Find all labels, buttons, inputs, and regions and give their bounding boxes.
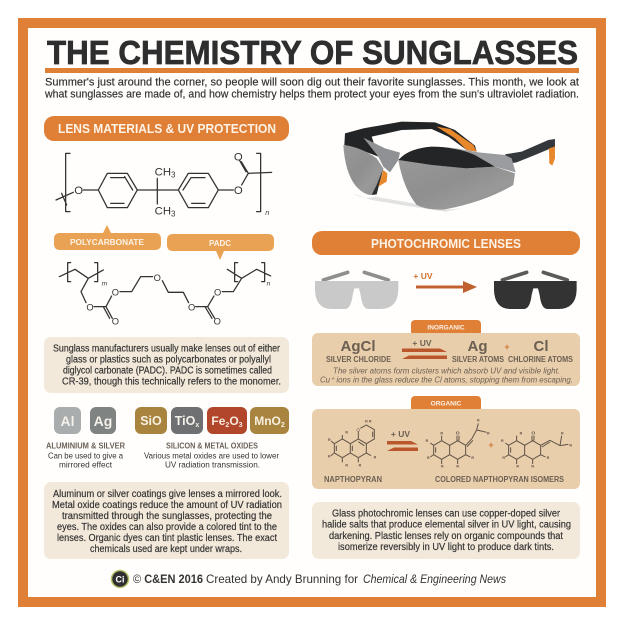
tile: Al [54, 407, 81, 434]
structure: napthopyran isomer two: R [531, 465, 534, 469]
text panel: photochromic: darkening. Plastic lenses rely on organic compounds that [329, 531, 563, 542]
chemical structure: polycarbonate: n [265, 208, 269, 217]
arrow: plus UV [413, 271, 477, 293]
tile: MnO2 [250, 407, 289, 434]
text panel: lens materials: diglycol carbonate (PADC). PADC is sometimes called [63, 366, 272, 376]
structure: napthopyran isomer two: R [501, 439, 504, 443]
icon: dark glasses [494, 272, 577, 309]
caption: silicon and metal oxides: SILICON & METAL OXIDES [166, 442, 259, 450]
caption: silicon and metal oxides [144, 442, 279, 470]
chemical structure: polycarbonate: 3 [171, 210, 176, 219]
chemical structure: PADC: O [188, 302, 195, 312]
tile: SiO [135, 407, 167, 434]
footer credit: © C&EN 2016 [133, 572, 203, 586]
structure: napthopyran: R R [365, 420, 372, 424]
caption: silicon and metal oxides: UV radiation transmission. [165, 460, 260, 470]
chemical structure: PADC: m [102, 281, 108, 288]
text panel: coatings: lenses. Organic dyes can tint plastic lenses. The exact [57, 533, 277, 544]
tile: MnO2: 2 [281, 422, 285, 429]
tile: TiOx: x [195, 422, 199, 429]
text panel: coatings: transmitted through the sunglasses, protecting the [62, 511, 272, 522]
tile: MnO2: MnO [254, 414, 281, 428]
text panel: coatings: Metal oxide coatings reduce the amount of UV radiation [52, 500, 282, 511]
tag: PADC: PADC [209, 239, 231, 248]
chemical structure: PADC: O [112, 317, 119, 327]
text panel: coatings: Aluminum or silver coatings give lenses a mirrored look. [53, 489, 282, 500]
reaction: silver chloride: SILVER CHLORIDE [326, 355, 392, 364]
chemical structure: PADC: n [267, 281, 271, 288]
panel: organic: ORGANIC [431, 400, 462, 408]
title: THE CHEMISTRY OF SUNGLASSES [47, 34, 578, 71]
chemical structure: PADC [59, 263, 271, 327]
reaction: silver chloride: SILVER ATOMS [452, 355, 505, 364]
photo: sunglasses [343, 122, 555, 212]
structure: napthopyran isomer one: R [487, 431, 490, 435]
caption: aluminium and silver: ALUMINIUM & SILVER [46, 442, 125, 450]
tile: Fe2O3: 3 [239, 422, 243, 429]
tile: Ag [90, 407, 116, 434]
tile: Fe2O3: 2 [225, 422, 229, 429]
caption: aluminium and silver: Can be used to give a [48, 452, 124, 460]
chemical structure: polycarbonate: O [74, 185, 83, 197]
structure: napthopyran isomer one: R [440, 431, 443, 435]
chemical structure: polycarbonate: CH [155, 206, 171, 218]
reaction: silver chloride: Cl [534, 338, 548, 355]
label: napthopyran: NAPTHOPYRAN [324, 475, 382, 484]
text panel: coatings [44, 482, 289, 559]
text panel: photochromic: halide salts that produce elemental silver in UV light, causing [322, 520, 571, 530]
structure: napthopyran isomer one: O [456, 430, 460, 436]
structure: napthopyran isomer one: R [427, 456, 430, 460]
tile: Al: Al [60, 413, 74, 429]
tile: SiO: SiO [140, 414, 162, 428]
structure: napthopyran isomer two: R [520, 431, 523, 435]
structure: napthopyran isomer two: R [502, 456, 505, 460]
tile: TiOx [171, 407, 203, 434]
arrow: plus UV: + UV [413, 271, 433, 281]
chemical structure: PADC: O [214, 287, 221, 297]
chemical structure: polycarbonate [56, 152, 272, 219]
text panel: photochromic: Glass photochromic lenses can use copper-doped silver [332, 508, 561, 520]
text panel: lens materials [44, 337, 289, 393]
footer credit: Created by Andy Brunning for [206, 572, 358, 586]
heading: photochromic lenses [312, 231, 580, 255]
structure: napthopyran [328, 420, 377, 468]
tag: polycarbonate [54, 225, 161, 250]
caption: silicon and metal oxides: Various metal oxides are used to lower [144, 452, 279, 460]
structure: napthopyran isomer one: R [456, 465, 459, 469]
explanation: silver atoms: The silver atoms form clusters which absorb UV and visible light. [333, 366, 560, 376]
chemical structure: polycarbonate: CH [155, 166, 171, 178]
tile: Ag: Ag [94, 413, 112, 429]
icon: Ci logo: Ci [116, 574, 124, 584]
tile: TiOx: TiO [175, 414, 195, 428]
structure: napthopyran: R [328, 455, 331, 459]
plus sign: + [488, 440, 494, 450]
structure: napthopyran: R [345, 464, 348, 468]
structure: napthopyran isomer one: R [471, 456, 474, 460]
arrow: plus UV reversible [387, 429, 418, 451]
heading: lens materials [44, 116, 289, 141]
reaction: silver chloride: CHLORINE ATOMS [508, 355, 574, 364]
text panel: lens materials: glass or plastics such as polycarbonates or polyallyl [66, 354, 271, 366]
chemical structure: polycarbonate: O [234, 185, 243, 197]
label: colored isomers: COLORED NAPTHOPYRAN ISOMERS [435, 475, 565, 484]
text panel: photochromic [312, 502, 580, 559]
panel: inorganic: INORGANIC [427, 324, 465, 332]
footer credit: Chemical & Engineering News [363, 572, 506, 586]
tile: Fe2O3: Fe [211, 414, 225, 428]
reaction: silver chloride: Ag [468, 338, 488, 355]
reaction: silver chloride: + [504, 342, 510, 352]
text panel: coatings: chemicals used are kept under wraps. [90, 544, 242, 555]
structure: napthopyran: O [356, 428, 360, 434]
structure: napthopyran isomer two: R [569, 443, 572, 447]
tag: PADC [167, 234, 274, 260]
reaction: silver chloride: AgCl [340, 338, 376, 355]
heading: lens materials: LENS MATERIALS & UV PROTECTION [58, 122, 276, 136]
tile: Fe2O3 [207, 407, 247, 434]
title underline [45, 68, 579, 73]
chemical structure: polycarbonate: O [234, 152, 243, 164]
panel: inorganic [312, 320, 580, 386]
tile: Fe2O3: O [229, 414, 239, 428]
intro text: Summer's just around the corner, so people will soon dig out their favorite sunglasses. This month, we look at [45, 76, 579, 88]
footer credit [112, 570, 506, 588]
reaction: silver chloride: + UV [412, 338, 432, 348]
structure: napthopyran isomer two: R [547, 456, 550, 460]
structure: napthopyran: R [328, 438, 331, 442]
structure: napthopyran: R [345, 430, 348, 434]
explanation: silver atoms: Cu⁺ ions in the glass reduce the Cl atoms, stopping them from escaping. [320, 376, 573, 384]
intro text: what sunglasses are made of, and how chemistry helps them protect your eyes from the sun's ultraviolet radiation. [44, 88, 579, 100]
structure: napthopyran: R [359, 464, 362, 468]
structure: napthopyran isomer one: R [477, 419, 480, 423]
heading: photochromic lenses: PHOTOCHROMIC LENSES [371, 237, 521, 251]
chemical structure: PADC: O [112, 287, 119, 297]
chemical structure: polycarbonate: 3 [171, 170, 176, 179]
structure: napthopyran: R [374, 455, 377, 459]
structure: napthopyran isomer one [426, 419, 490, 469]
chemical structure: PADC: O [214, 317, 221, 327]
arrow: plus UV reversible: + UV [391, 429, 410, 439]
tag: polycarbonate: POLYCARBONATE [70, 238, 145, 247]
structure: napthopyran isomer two: R [561, 431, 564, 435]
explanation: silver atoms [320, 366, 573, 384]
icon: clear glasses [315, 272, 398, 309]
structure: napthopyran isomer two: O [531, 430, 535, 436]
text panel: photochromic: isomerize reversibly in UV light to produce dark tints. [338, 542, 554, 553]
icon: Ci logo [112, 570, 128, 588]
text panel: lens materials: CR-39, though this technically refers to the monomer. [62, 376, 281, 388]
structure: napthopyran isomer two [501, 430, 572, 469]
structure: napthopyran isomer one: R [441, 465, 444, 469]
intro text [44, 76, 579, 100]
caption: aluminium and silver [46, 442, 125, 470]
text panel: coatings: eyes. The oxides can also provide a colored tint to the [57, 522, 277, 533]
structure: napthopyran isomer one: R [426, 439, 429, 443]
text panel: lens materials: Sunglass manufacturers usually make lenses out of either [53, 344, 281, 354]
panel: organic [312, 396, 580, 489]
caption: aluminium and silver: mirrored effect [59, 460, 113, 470]
chemical structure: PADC: O [86, 302, 94, 312]
chemical structure: PADC: O [154, 273, 161, 283]
reaction: silver chloride [326, 338, 574, 364]
structure: napthopyran isomer two: R [516, 465, 519, 469]
